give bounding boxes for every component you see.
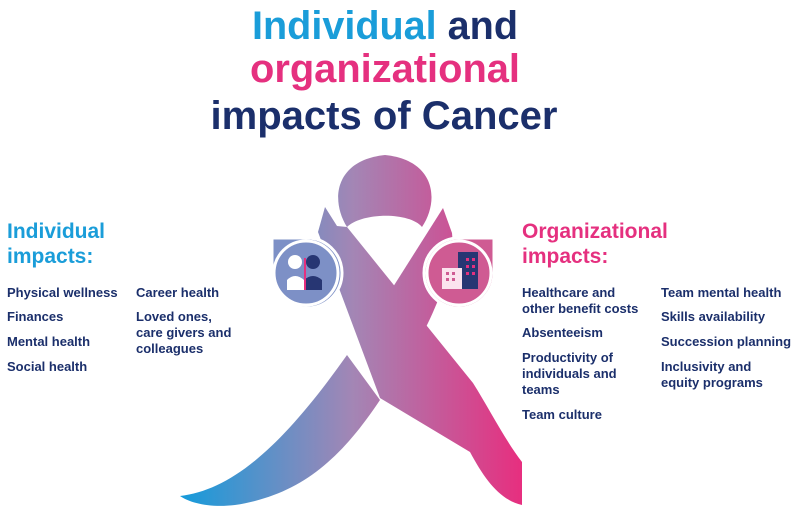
heading: organizational impacts [522,220,668,268]
list: individual impacts: colleagues [136,341,203,356]
ribbon lower left strand [180,355,380,506]
list: individual impacts [7,285,231,374]
list: individual impacts: Mental health [7,334,90,349]
list: organizational impacts: Succession planning [661,334,791,349]
list: organizational impacts: Team culture [522,407,602,422]
list: organizational impacts: Team mental health [661,285,781,300]
heading: organizational impacts: Organizational [522,220,668,243]
list: individual impacts: Physical wellness [7,285,118,300]
icon: organization shield [424,238,494,308]
title: impacts of Cancer [210,94,558,138]
heading: individual impacts: Individual [7,220,105,243]
list: organizational impacts: other benefit costs [522,301,638,316]
list: organizational impacts: teams [522,382,560,397]
ribbon upper right strand [393,208,452,333]
list: individual impacts: Career health [136,285,219,300]
icon: individual shield [272,238,342,308]
heading: organizational impacts: impacts: [522,245,608,268]
ribbon [180,155,522,506]
title [210,4,558,138]
title: Individual and [252,4,518,48]
list: individual impacts: care givers and [136,325,231,340]
list: organizational impacts: equity programs [661,375,763,390]
list: individual impacts: Finances [7,309,63,324]
list: organizational impacts: Absenteeism [522,325,603,340]
list: organizational impacts: individuals and [522,366,617,381]
list: individual impacts: Loved ones, [136,309,212,324]
ribbon loop [338,155,432,227]
list: organizational impacts: Skills availability [661,309,766,324]
heading: individual impacts [7,220,105,268]
title: organizational [250,47,520,91]
list: organizational impacts: Inclusivity and [661,359,751,374]
list: individual impacts: Social health [7,359,87,374]
ribbon main strand [318,207,522,505]
heading: individual impacts: impacts: [7,245,93,268]
list: organizational impacts: Healthcare and [522,285,615,300]
list: organizational impacts: Productivity of [522,350,614,365]
list: organizational impacts [522,285,791,422]
